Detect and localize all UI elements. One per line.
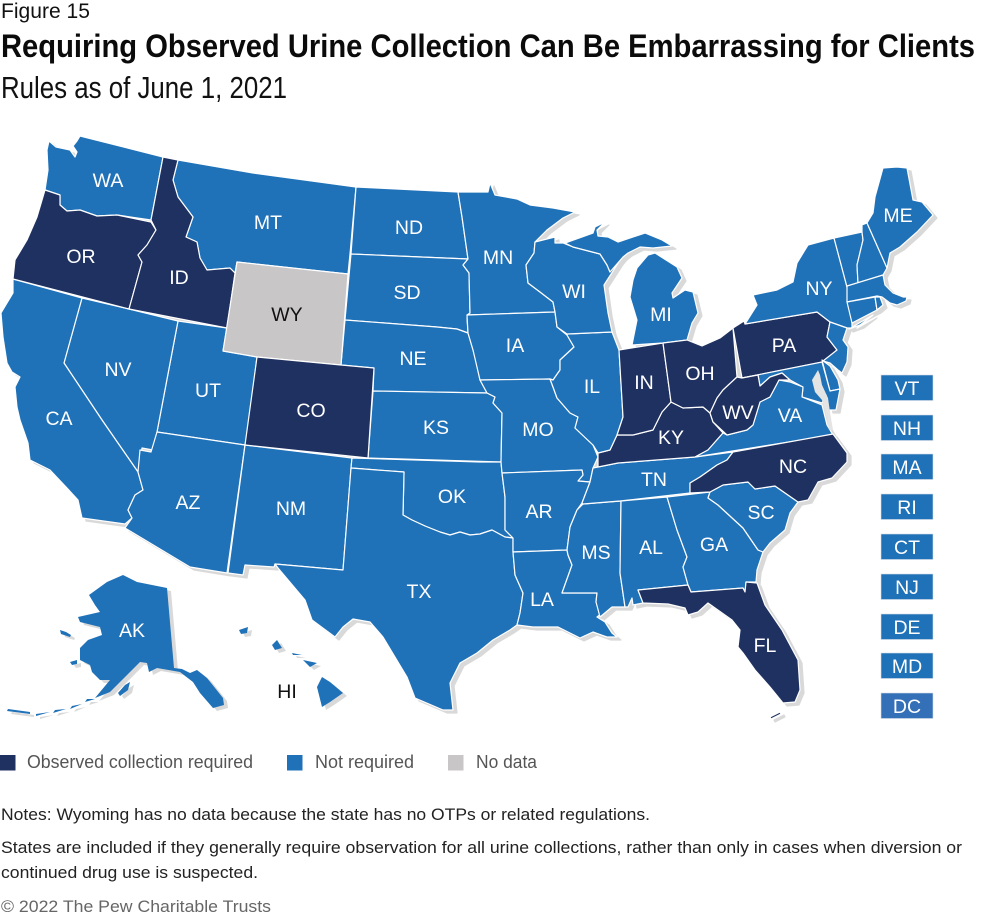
state labels on map: MI: [650, 304, 672, 326]
state labels on map: FL: [754, 635, 777, 657]
state: AL: [620, 497, 688, 607]
small state label boxes: DE: [893, 617, 921, 639]
state: IN: [617, 343, 671, 435]
notes: States are included if they generally require observation for all urine collections, rather than only in cases when diversion or: [1, 839, 963, 857]
state: SC: [708, 482, 798, 552]
state: AR: [502, 470, 590, 552]
state: CT: [847, 297, 877, 323]
notes: [1, 806, 963, 882]
legend: Observed collection required: [27, 752, 253, 772]
state: MO: [480, 379, 598, 482]
state labels on map: VA: [778, 405, 802, 427]
state labels on map: KS: [423, 417, 449, 439]
small state label boxes: MD: [892, 656, 922, 678]
state: TX: [275, 468, 523, 710]
state labels on map: OH: [685, 363, 715, 385]
state: NM: [228, 445, 352, 575]
state labels on map: NC: [779, 456, 807, 478]
state: VA: [695, 380, 833, 457]
state: RI: [875, 297, 883, 310]
state: OK: [351, 458, 513, 538]
small state label boxes: CT: [894, 537, 920, 559]
state labels on map: IN: [634, 372, 654, 394]
state labels on map: GA: [700, 534, 728, 556]
state: IL: [550, 332, 623, 453]
state: ME: [867, 167, 933, 268]
state: IA: [467, 312, 574, 380]
state: MN: [458, 183, 575, 315]
legend: [0, 752, 538, 772]
state labels on map: TX: [407, 581, 431, 603]
state: UT: [157, 321, 257, 445]
state: PA: [733, 312, 837, 378]
copyright: © 2022 The Pew Charitable Trusts: [1, 897, 271, 916]
state labels on map: OR: [66, 246, 96, 268]
state labels on map: MO: [522, 419, 554, 441]
small state label boxes: [881, 375, 933, 718]
map of United States: [1, 136, 933, 719]
state labels on map: CO: [296, 400, 326, 422]
state: SD: [345, 254, 470, 333]
state labels on map: PA: [772, 335, 796, 357]
state: AZ: [125, 432, 245, 573]
state labels on map: MN: [483, 247, 513, 269]
state labels on map: KY: [658, 427, 684, 449]
state: NY and Long Island: [745, 238, 873, 329]
state labels on map: SC: [747, 502, 775, 524]
notes: continued drug use is suspected.: [1, 864, 258, 882]
state: NH: [857, 223, 887, 283]
state: NE: [341, 320, 487, 393]
state: NJ: [823, 322, 848, 373]
state: MA: [847, 275, 907, 305]
state labels on map: AR: [525, 501, 553, 523]
state: OR: [13, 190, 156, 309]
state: AK with islands: [7, 575, 224, 716]
state labels on map: MT: [254, 212, 282, 234]
state: HI islands: [239, 627, 343, 707]
small state label boxes: DC: [893, 696, 921, 718]
state labels on map: IA: [506, 335, 524, 357]
state: GA: [667, 492, 763, 592]
state: KS: [368, 391, 502, 462]
state: MT: [173, 160, 356, 274]
legend: No data: [476, 752, 538, 772]
state labels on map: LA: [530, 589, 554, 611]
state: LA: [513, 550, 617, 638]
state labels on map: ID: [169, 267, 189, 289]
state labels on map: AZ: [176, 492, 201, 514]
state: WY: [223, 262, 348, 365]
state: MI upper and lower peninsulas: [565, 222, 698, 345]
state labels on map: [45, 170, 913, 703]
state labels on map: WV: [722, 402, 754, 424]
state: CA: [1, 279, 143, 524]
state labels on map: WI: [562, 281, 586, 303]
small state label boxes: MA: [892, 457, 922, 479]
state labels on map: UT: [195, 380, 221, 402]
state: ID: [129, 157, 235, 328]
state labels on map: CA: [45, 408, 73, 430]
state labels on map: IL: [584, 376, 600, 398]
state labels on map: ND: [395, 217, 423, 239]
small state label boxes: RI: [897, 497, 917, 519]
state: WV: [710, 373, 790, 435]
notes: Notes: Wyoming has no data because the state has no OTPs or related regulations.: [1, 806, 650, 824]
state labels on map: HI: [277, 681, 297, 703]
subtitle: Rules as of June 1, 2021: [1, 70, 287, 105]
state: CO: [245, 357, 374, 458]
state: ND: [351, 187, 468, 259]
state: KY: [598, 402, 723, 467]
state: FL and keys: [638, 582, 800, 719]
state labels on map: AK: [119, 620, 145, 642]
state labels on map: WA: [93, 170, 123, 192]
state labels on map: OK: [438, 486, 466, 508]
state labels on map: AL: [639, 537, 663, 559]
state: MD: [742, 362, 840, 410]
legend: Not required: [315, 752, 414, 772]
small state label boxes: VT: [895, 378, 920, 400]
state: TN: [582, 452, 733, 504]
state labels on map: NM: [276, 498, 306, 520]
state: MS: [562, 501, 625, 617]
state labels on map: ME: [883, 205, 913, 227]
state: WA: [45, 136, 163, 220]
state: NC: [690, 434, 847, 502]
Chesapeake Bay: [812, 370, 833, 430]
state: OH: [663, 328, 737, 413]
state: WI: [526, 237, 622, 334]
state labels on map: SD: [393, 282, 421, 304]
state labels on map: NE: [399, 348, 427, 370]
state labels on map: WY: [271, 304, 303, 326]
state labels on map: NY: [805, 278, 833, 300]
state: DE: [822, 360, 840, 391]
state: NV: [64, 298, 178, 472]
state: VT: [834, 232, 863, 287]
small state label boxes: NH: [893, 418, 921, 440]
state labels on map: TN: [641, 469, 667, 491]
small state label boxes: NJ: [895, 577, 919, 599]
state labels on map: NV: [104, 359, 132, 381]
state labels on map: MS: [581, 542, 611, 564]
